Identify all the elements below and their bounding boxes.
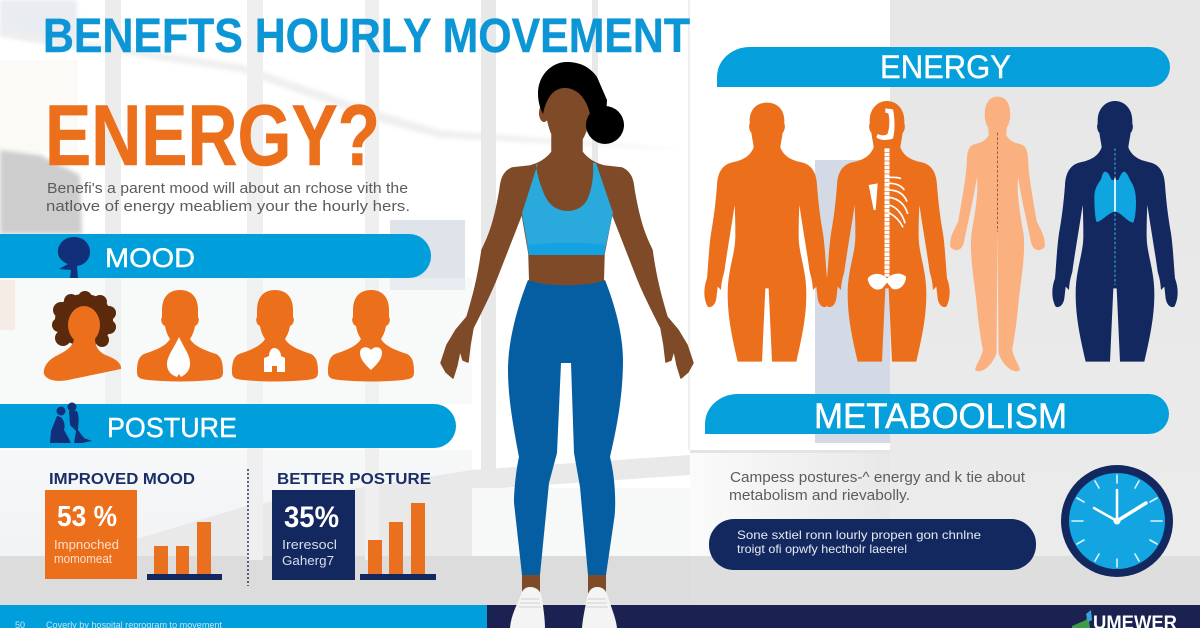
bust with curly hair: [44, 291, 121, 381]
body: solid orange: [704, 103, 830, 362]
body: [441, 135, 693, 378]
leggings: [508, 280, 623, 575]
callout pill: Sone sxtiel ronn lourly propen gon chnlne: [737, 528, 981, 542]
panel: mood banner: [0, 234, 431, 278]
intro text: Benefi's a parent mood will about an rchose vith the: [47, 181, 408, 197]
stat card: Ireresocl: [282, 537, 337, 552]
icon: head silhouette: [58, 237, 90, 278]
posture label: POSTURE: [107, 412, 237, 443]
bust with drop: [137, 290, 223, 382]
intro text: [46, 181, 410, 215]
stat card: 35%: [284, 501, 339, 534]
metabolism label: METABOOLISM: [814, 397, 1067, 436]
icon: clock: [1061, 465, 1173, 577]
panel: better posture stat: [272, 471, 436, 580]
panel: energy banner: [717, 47, 1170, 87]
body diagrams: [704, 97, 1178, 371]
footer logo: [1072, 610, 1177, 628]
stat card: [272, 490, 355, 580]
panel: metabolism banner: [705, 394, 1169, 436]
icon: two figures: [50, 402, 92, 443]
body: peach outline: [950, 97, 1045, 371]
mood label: MOOD: [105, 243, 195, 273]
intro text: natlove of energy meabliem your the hourly hers.: [46, 199, 410, 215]
panel: posture banner: [0, 402, 456, 448]
bar chart: [360, 503, 436, 580]
bar chart: [147, 522, 222, 580]
stat card: momomeat: [54, 551, 112, 566]
ankles: [522, 570, 606, 594]
shoes: [510, 587, 617, 628]
panel: improved mood stat: [45, 471, 222, 580]
stat card: Gaherg7: [282, 553, 334, 568]
callout pill: [709, 519, 1036, 570]
metabolism text: metabolism and rievabolly.: [729, 487, 910, 504]
metabolism text: Campess postures-^ energy and k tie about: [730, 469, 1026, 486]
stat card: [45, 490, 137, 579]
title: BENEFTS HOURLY MOVEMENT: [43, 10, 690, 63]
sports top: [522, 163, 613, 255]
stat card: Impnoched: [54, 537, 119, 552]
stat heading: IMPROVED MOOD: [49, 471, 195, 488]
energy label: ENERGY: [880, 49, 1011, 85]
body: skeleton: [824, 101, 950, 362]
stat card: 53 %: [57, 501, 117, 533]
central figure: woman: [441, 62, 693, 628]
heading: energy question: ENERGY?: [45, 88, 380, 184]
head: [538, 62, 624, 151]
bust with heart: [328, 290, 414, 382]
icons: mood busts: [44, 290, 414, 382]
stat heading: BETTER POSTURE: [277, 471, 431, 488]
metabolism text: [729, 469, 1026, 504]
bust with chest figure: [232, 290, 318, 382]
body: navy with lungs: [1052, 101, 1178, 362]
callout pill: troigt ofi opwfy hectholr laeerel: [737, 542, 907, 556]
